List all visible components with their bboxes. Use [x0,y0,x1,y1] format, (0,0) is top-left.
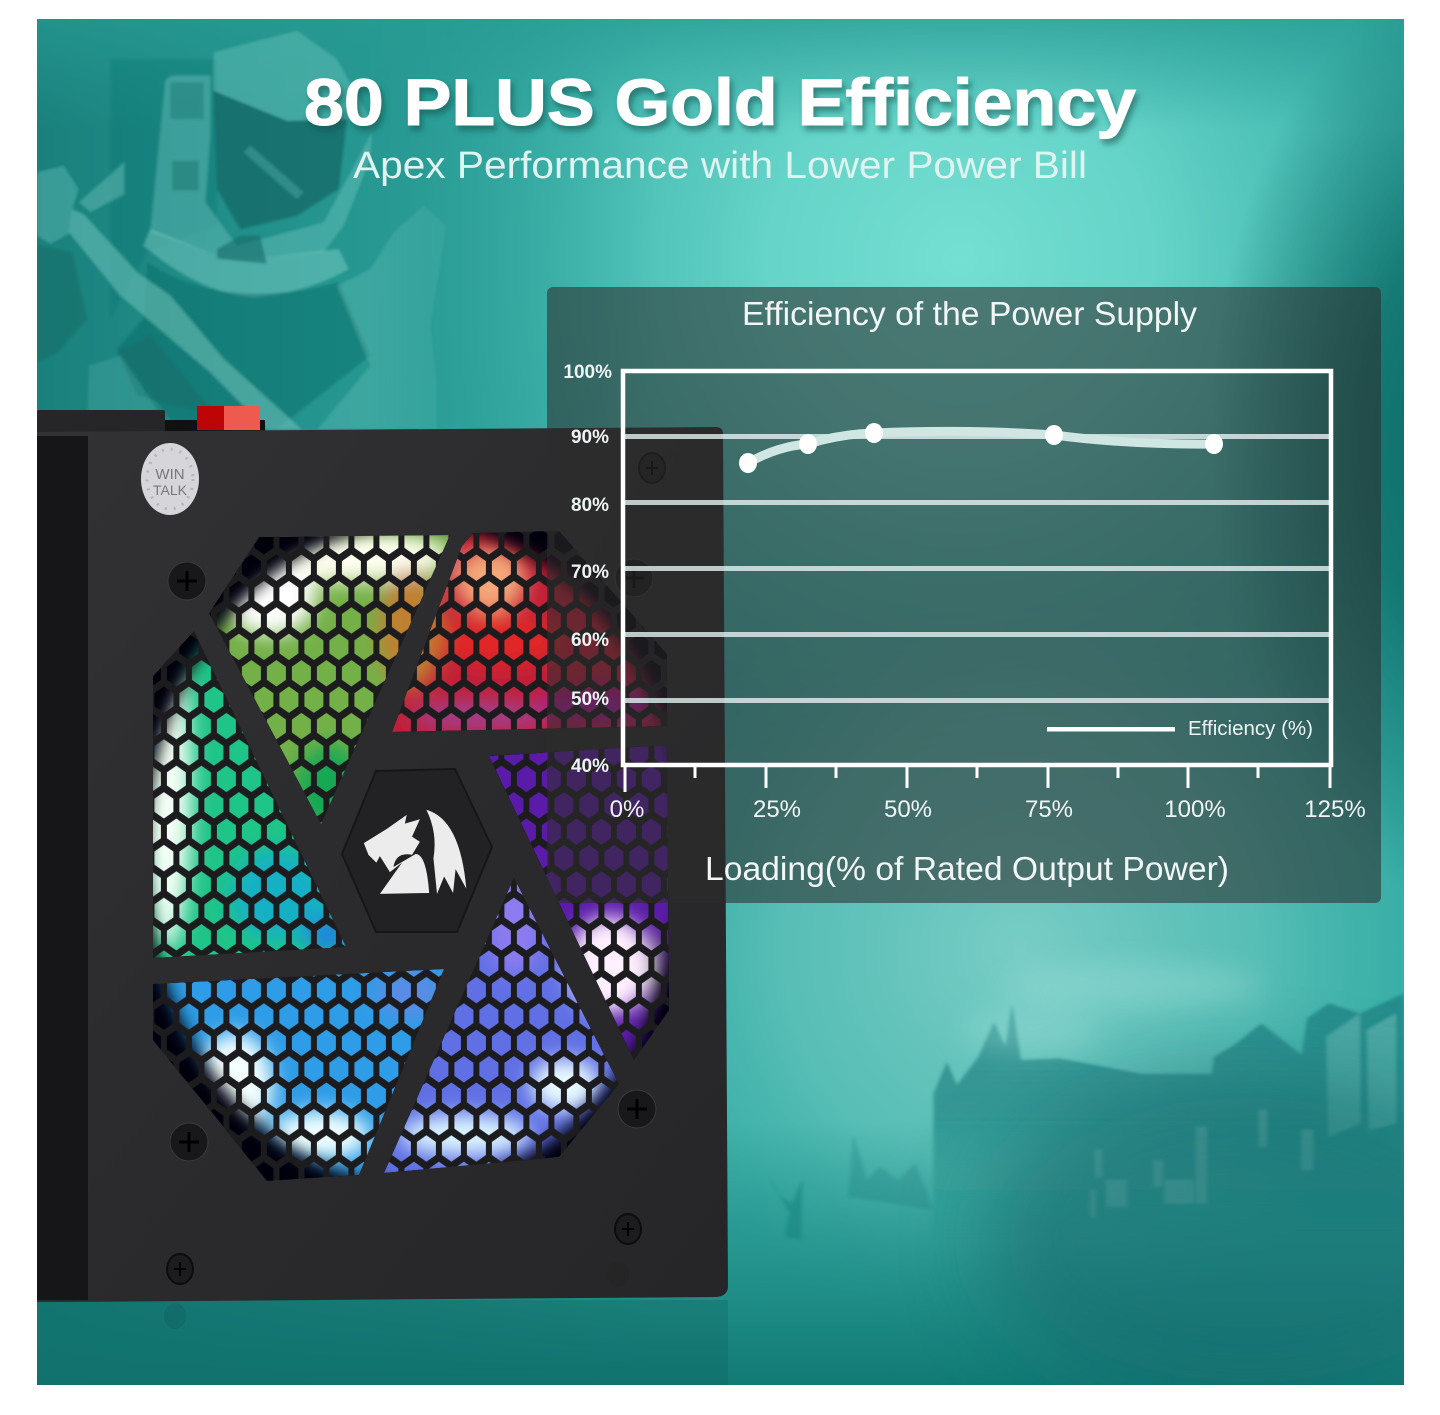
win talk sticker: WIN [155,466,185,483]
plot frame [623,371,1331,765]
castle background [781,994,1404,1385]
y axis labels: 70% [571,562,609,583]
y axis labels: 80% [571,495,609,516]
x axis labels: 75% [1025,796,1073,823]
x axis labels: 25% [753,796,801,823]
efficiency curve [739,423,1223,473]
fan grill recess [153,531,669,1181]
chart title: Efficiency of the Power Supply [742,295,1197,332]
y axis labels: 60% [571,630,609,651]
small screw lower left [167,1254,193,1284]
grid lines [624,434,1329,703]
title: 80 PLUS Gold Efficiency [304,65,1136,139]
win talk sticker: TALK [153,482,188,498]
y axis labels [563,362,612,777]
x axis labels: 125% [1304,796,1366,823]
red power switch [197,406,260,430]
panel: efficiency chart [547,287,1381,903]
x axis labels: 100% [1164,796,1226,823]
dragon logo [364,810,466,894]
x axis ticks [625,765,1330,792]
reflection of power supply [37,1300,728,1385]
x axis title: Loading(% of Rated Output Power) [705,850,1229,887]
logo hexagon badge [342,769,492,932]
y axis labels: 90% [571,427,609,448]
side face [37,436,88,1300]
segment base colours [153,531,669,1181]
rgb fan light through honeycomb [153,531,669,1181]
cloud highlights [960,963,1260,1052]
small screw upper right [639,453,665,483]
x axis labels [610,796,1366,823]
unit body [37,427,728,1302]
reflected screws [164,1261,629,1329]
large screw top right [615,559,653,597]
win talk sticker [141,443,199,515]
x axis labels: 0% [610,796,644,823]
line chart [563,362,1366,823]
large screw bottom right [618,1090,656,1128]
y axis labels: 40% [571,756,609,777]
y axis labels: 50% [571,689,609,710]
large screw bottom left [170,1123,208,1161]
dark outer ring of fan [153,531,669,1181]
legend [1047,718,1313,740]
soldier background figure [37,31,446,430]
small screw lower right [615,1214,641,1244]
large screw top left [168,562,206,600]
y axis labels: 100% [563,362,612,383]
legend: Efficiency (%) [1188,718,1313,740]
power supply unit [37,406,728,1302]
x axis labels: 50% [884,796,932,823]
switch housing [37,410,265,434]
subtitle: Apex Performance with Lower Power Bill [353,145,1087,187]
